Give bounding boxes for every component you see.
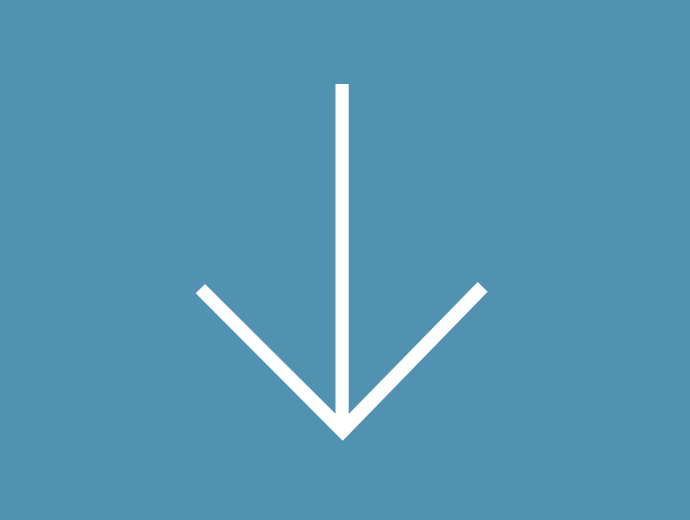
icon: downward arrow [196, 84, 488, 441]
